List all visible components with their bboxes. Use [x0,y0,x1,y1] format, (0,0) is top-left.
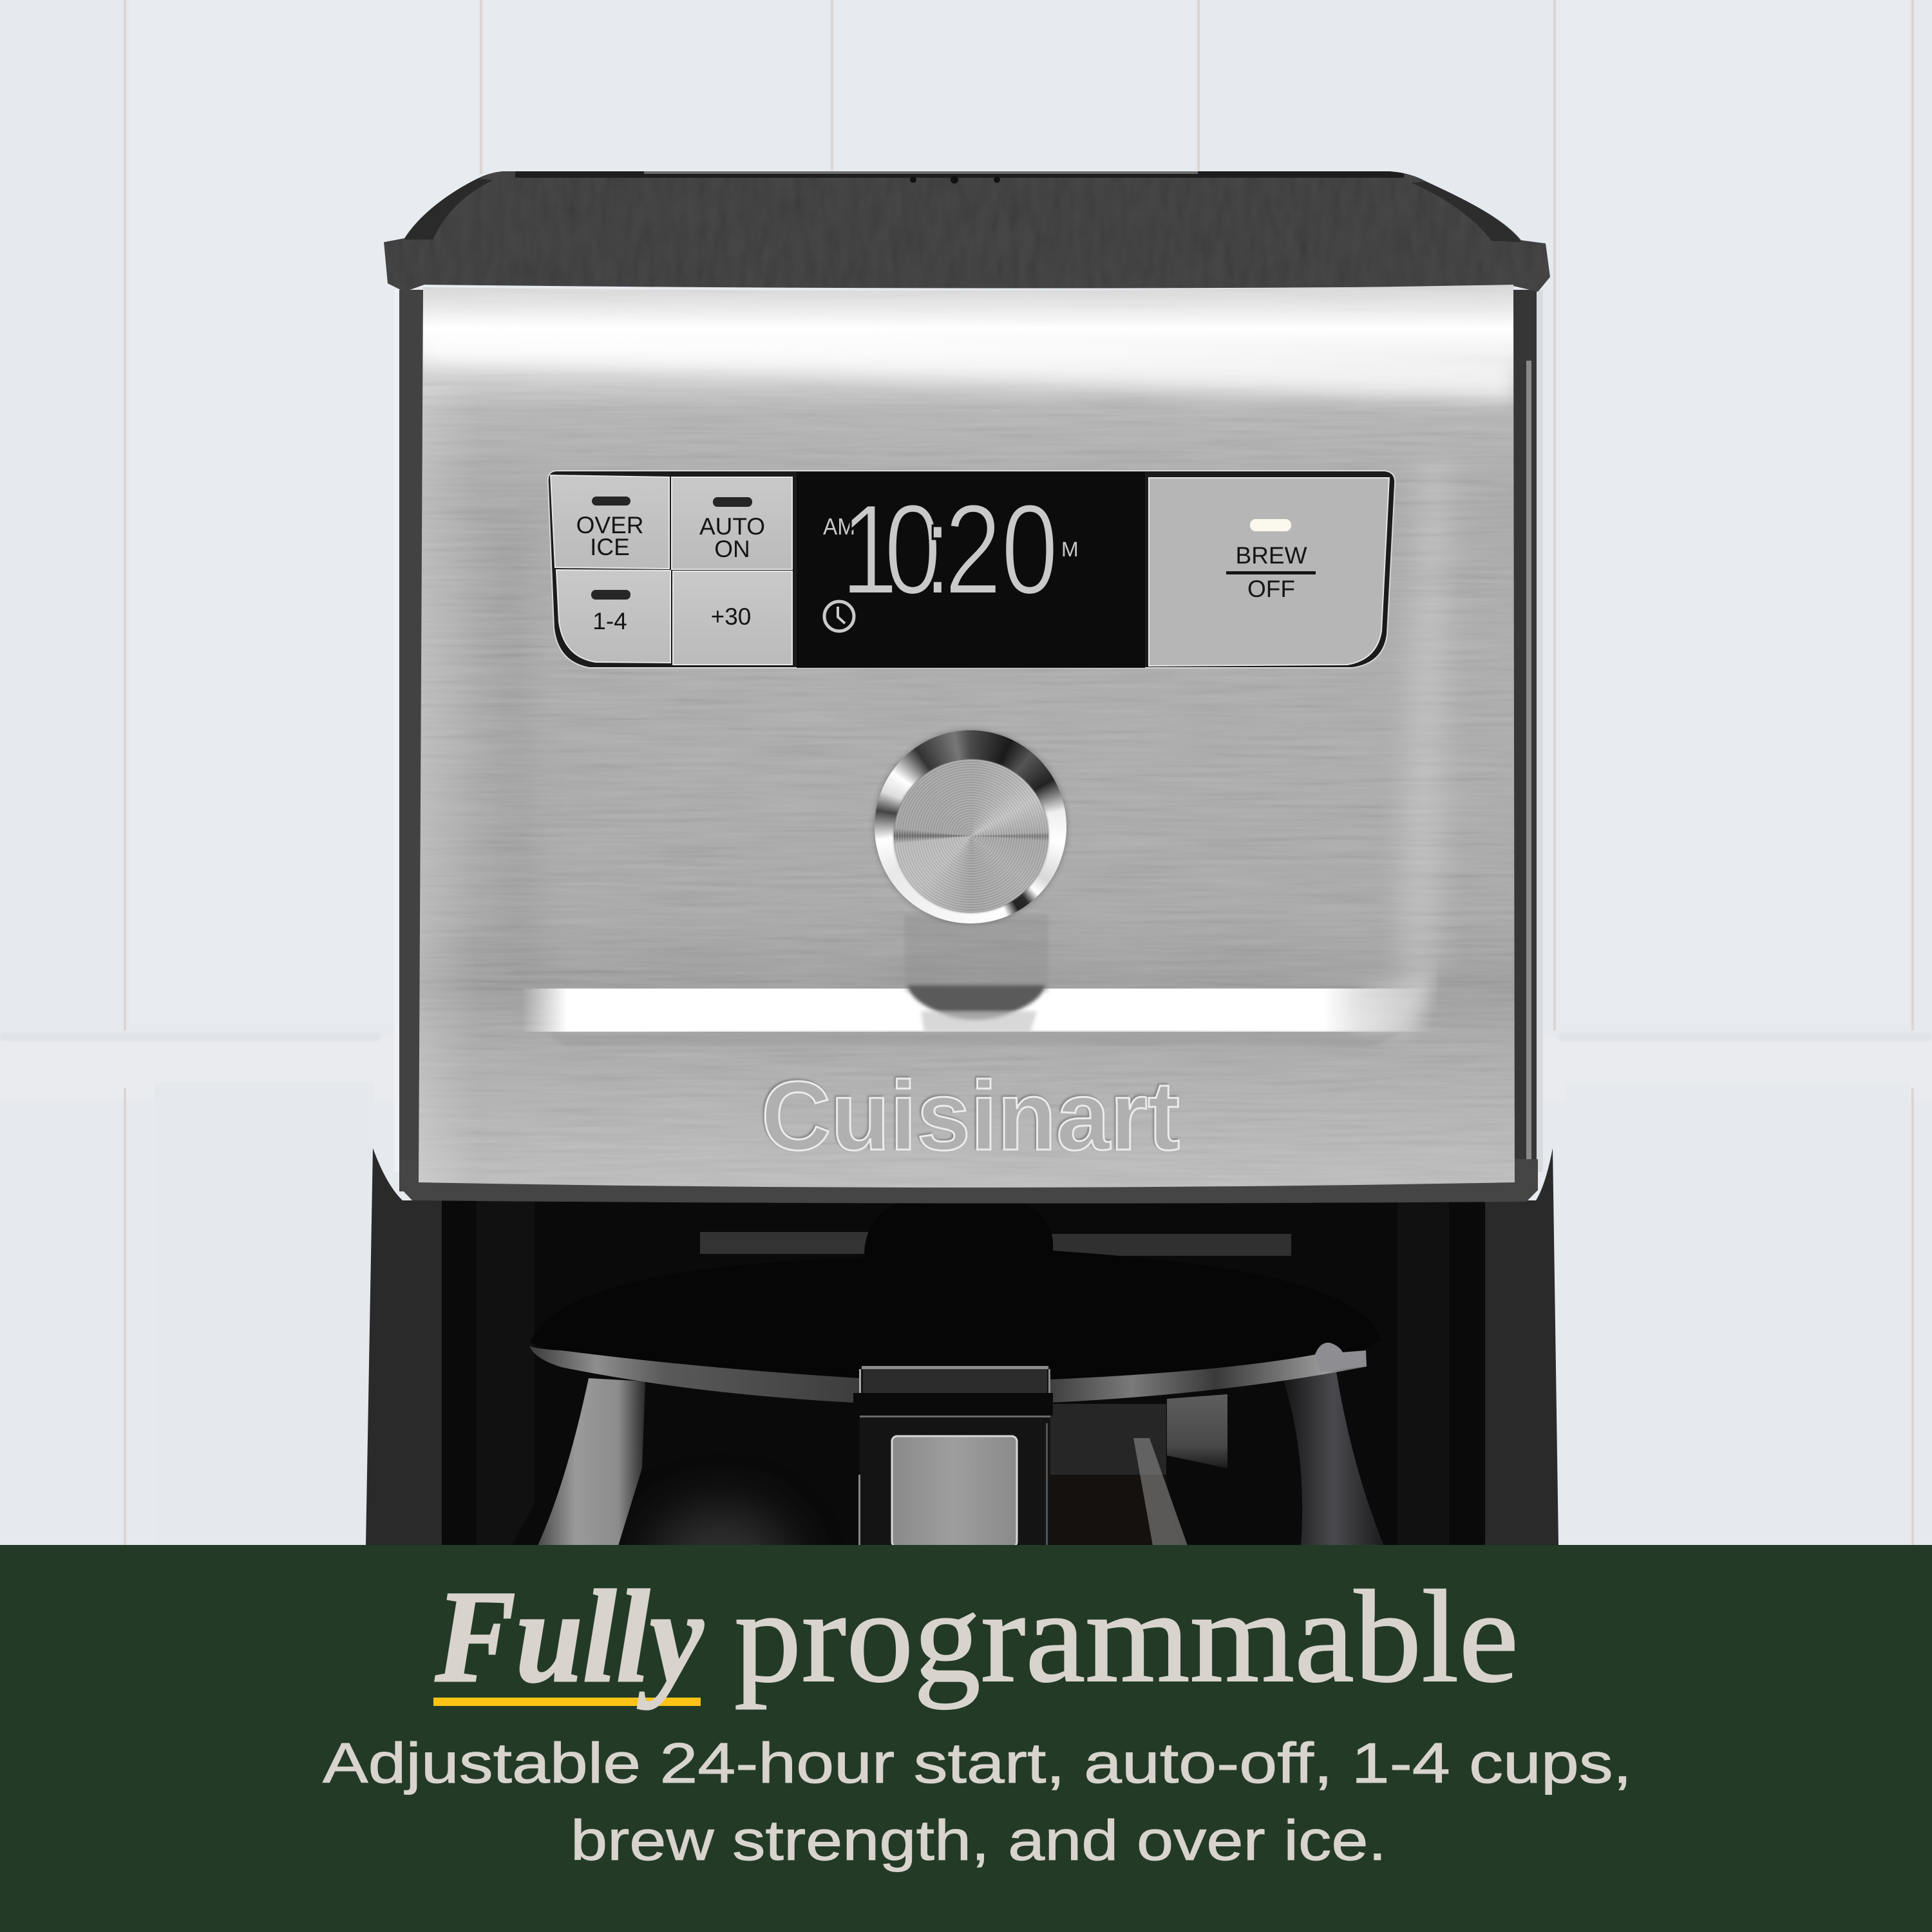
recess right highlight [1397,464,1449,992]
button: brew off: OFF [1247,576,1295,602]
stainless steel control panel [412,283,1520,1191]
button: over ice: ICE [590,534,630,560]
subtitle line 2: brew strength, and over ice. [571,1808,1387,1872]
keypad frame [548,471,1395,668]
lcd display: M [1061,538,1079,561]
button: auto on: ON [714,536,750,562]
carafe [511,1191,1398,1623]
caption band [0,1545,1932,1932]
icon: clock [824,601,854,631]
lower body and carafe cavity [366,1148,1558,1546]
button: 1-4 [556,570,670,663]
glass reflection: right [1050,1372,1384,1546]
button: brew off: BREW [1235,542,1307,569]
button: +30: +30 [711,603,751,630]
top lid [380,167,1552,296]
heading continuation: programmable [734,1564,1519,1710]
tiled wall background [0,0,1932,1546]
recess highlight band [522,989,1433,1032]
button: over ice: OVER [576,512,643,538]
rim notch [1315,1343,1367,1372]
button: auto on [672,477,792,569]
button: over ice [551,475,669,569]
control dial [872,728,1069,926]
button: +30 [673,571,792,665]
dial shadow [905,914,1048,992]
embossed Cuisinart logo: Cuisinart [761,1061,1180,1171]
button: auto on: AUTO [699,513,765,540]
lcd display [797,472,1145,668]
recess left shading [488,515,560,985]
heading: Fully [435,1564,704,1710]
side trim [394,290,1543,1204]
button: brew off [1149,478,1389,666]
lid [530,1191,1381,1402]
glass highlight: left [538,1378,645,1546]
glass body [511,1372,1398,1546]
handle steel plate [892,1436,1017,1547]
control keypad [548,471,1395,668]
handle [853,1366,1053,1547]
interior glow [650,1507,792,1623]
lcd display: AM [823,513,855,540]
coffee maker [366,167,1558,1623]
slanted top highlight [433,348,1513,407]
subtitle line 1: Adjustable 24-hour start, auto-off, 1-4 cups, [323,1731,1632,1795]
yellow underline [433,1698,701,1706]
button: 1-4: 1-4 [592,608,627,634]
rim [529,1346,1367,1403]
edge lightening [419,386,452,1182]
clock digits: 10:20 [841,478,1058,621]
